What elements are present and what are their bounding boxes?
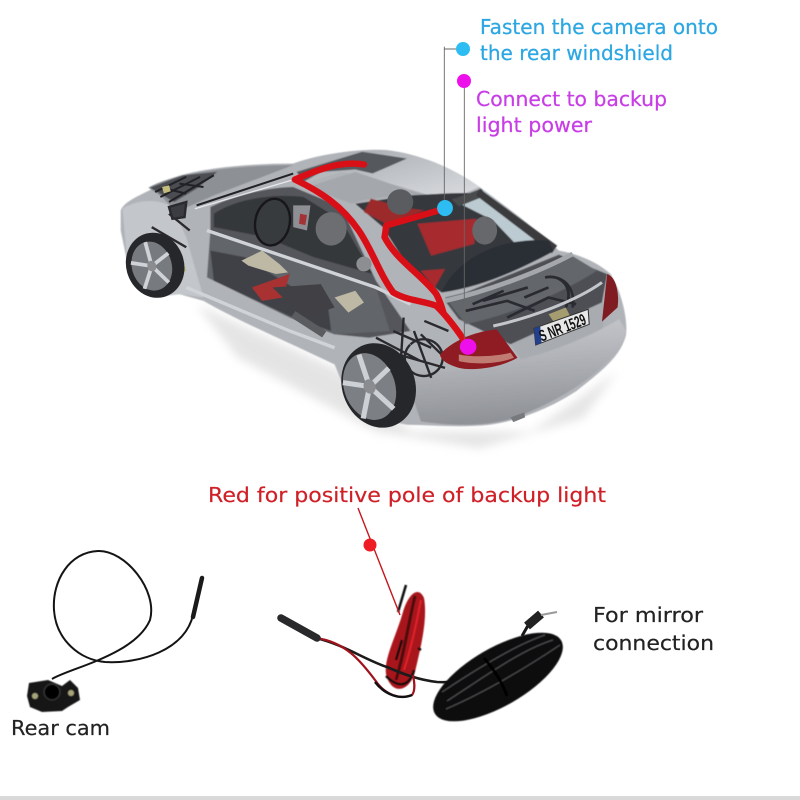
backup light dot [460,339,476,355]
camera cable [52,551,193,679]
cable connector [193,578,202,617]
callout text: camera: Fasten the camera onto [480,15,718,39]
power and video cable [281,585,576,739]
car ground shadow [197,304,618,448]
callout text: power: Connect to backup [476,87,667,111]
car cutaway illustration [118,47,626,448]
callout text: camera: the rear windshield [480,41,673,65]
audio jack plug [522,612,557,636]
callout: camera mounting [444,15,724,65]
door sills [186,230,410,348]
rear camera with cable [27,551,202,712]
mirror connection label: For mirror [593,603,704,627]
red wire coil [386,585,425,689]
seats and cabin details [241,189,497,318]
video connector [281,618,317,638]
wires to connector [316,638,475,697]
leader line [358,508,400,615]
blue bullet [456,42,470,56]
leader dot [364,538,376,552]
camera body [27,680,80,712]
car body [121,150,626,426]
camera mount dot [437,200,453,216]
bottom band [0,796,800,800]
callout: power connection [457,74,673,137]
licence plate [534,309,589,345]
boot opening parts [445,254,602,326]
licence plate: S NR 1529 [537,311,589,345]
red wire label: Red for positive pole of backup light [208,483,606,507]
black cable coil [420,615,576,739]
rear wheel [330,334,427,437]
connector: camera leader [444,48,462,50]
mirror connection label: connection [593,631,714,655]
engine bay details [155,174,293,209]
exhaust [511,412,525,422]
red cable route [295,163,467,346]
red wire leader [358,508,400,615]
callout text: power: light power [476,113,593,137]
magenta bullet [457,74,471,88]
tail lights [440,274,618,369]
suspension details [152,185,571,398]
front wheel [118,226,192,304]
rear cam label: Rear cam [11,716,110,740]
leader lines [444,47,464,344]
